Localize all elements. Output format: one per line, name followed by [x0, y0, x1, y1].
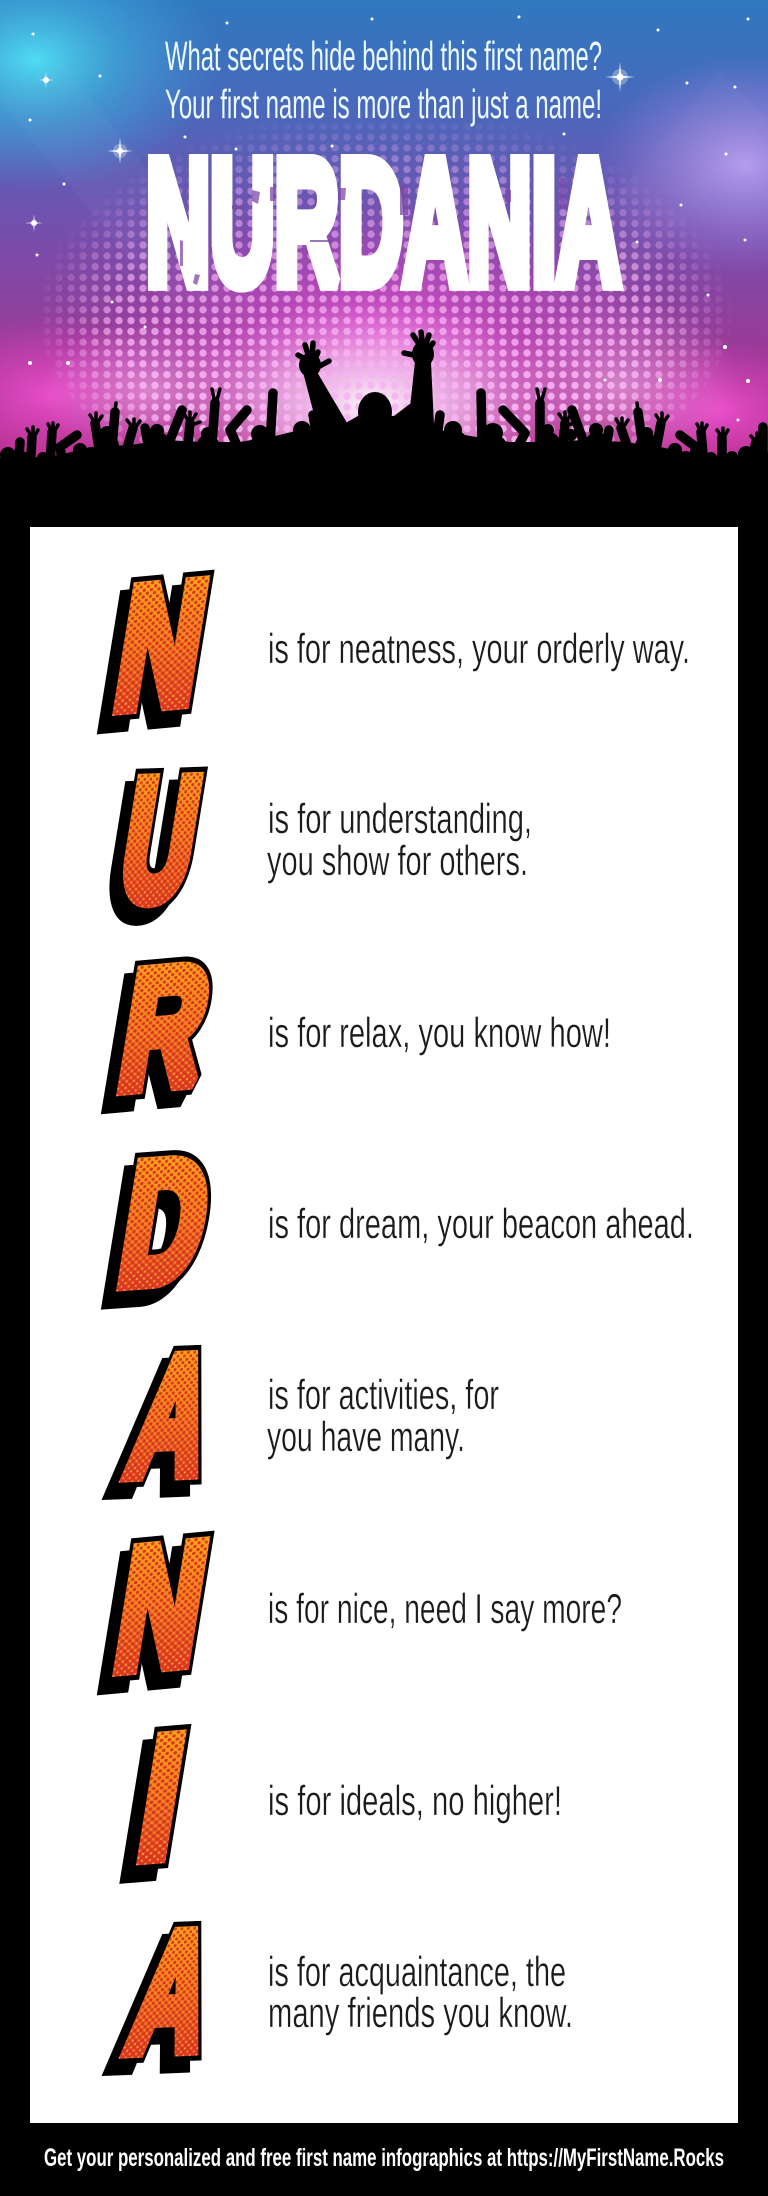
letter D: D: [109, 1123, 221, 1322]
letter I: I: [128, 1701, 194, 1895]
letter D: D: [109, 1123, 221, 1322]
text: relax: is for relax, you know how!: [268, 1009, 611, 1056]
letter U: U: [99, 755, 200, 949]
text: ideals: is for ideals, no higher!: [268, 1777, 562, 1824]
text: acquaintance: [268, 1948, 573, 2036]
letter A: A: [116, 1320, 229, 1511]
sparkles: [25, 16, 750, 422]
header: concert stage scene: [0, 0, 768, 458]
text: activities: you have many.: [267, 1413, 465, 1460]
letter D: D: [109, 1123, 221, 1322]
LED dot grid: [44, 116, 722, 443]
letter R: R: [109, 929, 221, 1125]
crowd arms: [18, 393, 763, 472]
letter N: N: [94, 1520, 207, 1720]
letter N: N: [105, 547, 218, 746]
letter N: N: [105, 1508, 218, 1707]
letter N: N: [105, 1508, 218, 1707]
letter U: U: [110, 743, 211, 937]
row U: understanding: [99, 743, 532, 949]
letter U: U: [110, 743, 211, 937]
row N: neatness: [94, 547, 690, 759]
crowd fingers: [27, 389, 763, 442]
letter R: R: [109, 929, 221, 1125]
letter A: A: [116, 1320, 229, 1511]
text: understanding: [267, 795, 532, 884]
letter N: N: [94, 559, 207, 759]
text: understanding: is for understanding,: [268, 795, 532, 842]
letter A: [102, 1344, 202, 1500]
row R: relax: [98, 929, 611, 1138]
letter N: N: [105, 547, 218, 746]
crowd shoulders: [0, 430, 759, 480]
row A: acquaintance: [102, 1920, 570, 2076]
letter D: D: [109, 1123, 221, 1322]
letter N: N: [105, 547, 218, 746]
text: activities: is for activities, for: [268, 1371, 499, 1418]
letter U: U: [110, 743, 211, 937]
letter R: R: [98, 942, 210, 1138]
letter R: R: [109, 929, 221, 1125]
letter A: A: [116, 1320, 229, 1511]
panel: white acrostic card: [30, 527, 738, 2123]
row A: activities: [105, 1320, 499, 1523]
letter N: N: [105, 547, 218, 746]
letter I: I: [128, 1701, 194, 1895]
crowd heads and palms: [299, 341, 434, 377]
letter A: A: [116, 1896, 229, 2087]
letter I: I: [116, 1714, 182, 1908]
letter R: R: [109, 929, 221, 1125]
letter N: N: [105, 1508, 218, 1707]
letter U: U: [110, 743, 211, 937]
main raised arms: [303, 362, 434, 445]
letter A: A: [116, 1896, 229, 2087]
letter A: A: [105, 1908, 217, 2099]
name title: NURDANIA: [146, 124, 621, 321]
tagline: [165, 33, 602, 127]
letter I: I: [128, 1701, 194, 1895]
row I: ideals: [116, 1701, 562, 1908]
letter A: A: [116, 1896, 229, 2087]
text: activities: [267, 1371, 499, 1460]
letter D: D: [98, 1136, 210, 1334]
letter A: [102, 1920, 202, 2076]
letter A: A: [116, 1320, 229, 1511]
row N: nice: [94, 1508, 622, 1720]
main hand fingers: [298, 332, 433, 368]
letter A: A: [105, 1332, 217, 1523]
letter I: I: [128, 1701, 194, 1895]
text: acquaintance: is for acquaintance, the: [268, 1948, 566, 1995]
row D: dream: [98, 1123, 694, 1334]
letter N: N: [105, 1508, 218, 1707]
text: acquaintance: many friends you know.: [268, 1989, 573, 2036]
text: understanding: you show for others.: [267, 837, 528, 884]
letter A: A: [116, 1896, 229, 2087]
crowd silhouette: [0, 332, 768, 536]
stage gradient background: [0, 0, 768, 510]
